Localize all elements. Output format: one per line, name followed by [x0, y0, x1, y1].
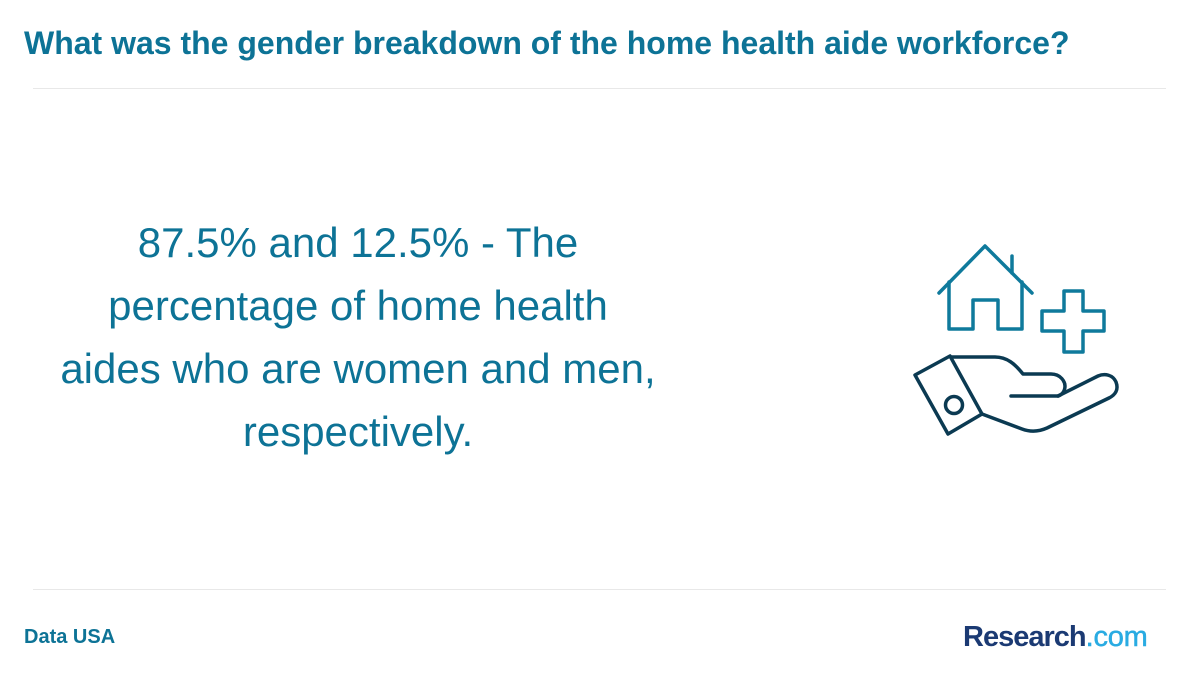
- icon: hand holding house and medical cross: [913, 244, 1119, 436]
- source label: Data USA: [24, 626, 115, 648]
- main statement text: [60, 219, 656, 455]
- logo: Research.com: Research.com: [963, 621, 1148, 653]
- icon: medical cross: [1042, 291, 1104, 352]
- icon: hand: [915, 356, 1117, 434]
- title: What was the gender breakdown of the home health aide workforce?: [24, 25, 1070, 61]
- main statement text: aides who are women and men,: [60, 345, 656, 392]
- main statement text: respectively.: [243, 408, 473, 455]
- main statement text: 87.5% and 12.5% - The: [138, 219, 578, 266]
- main statement text: percentage of home health: [108, 282, 608, 329]
- icon: house: [939, 246, 1032, 329]
